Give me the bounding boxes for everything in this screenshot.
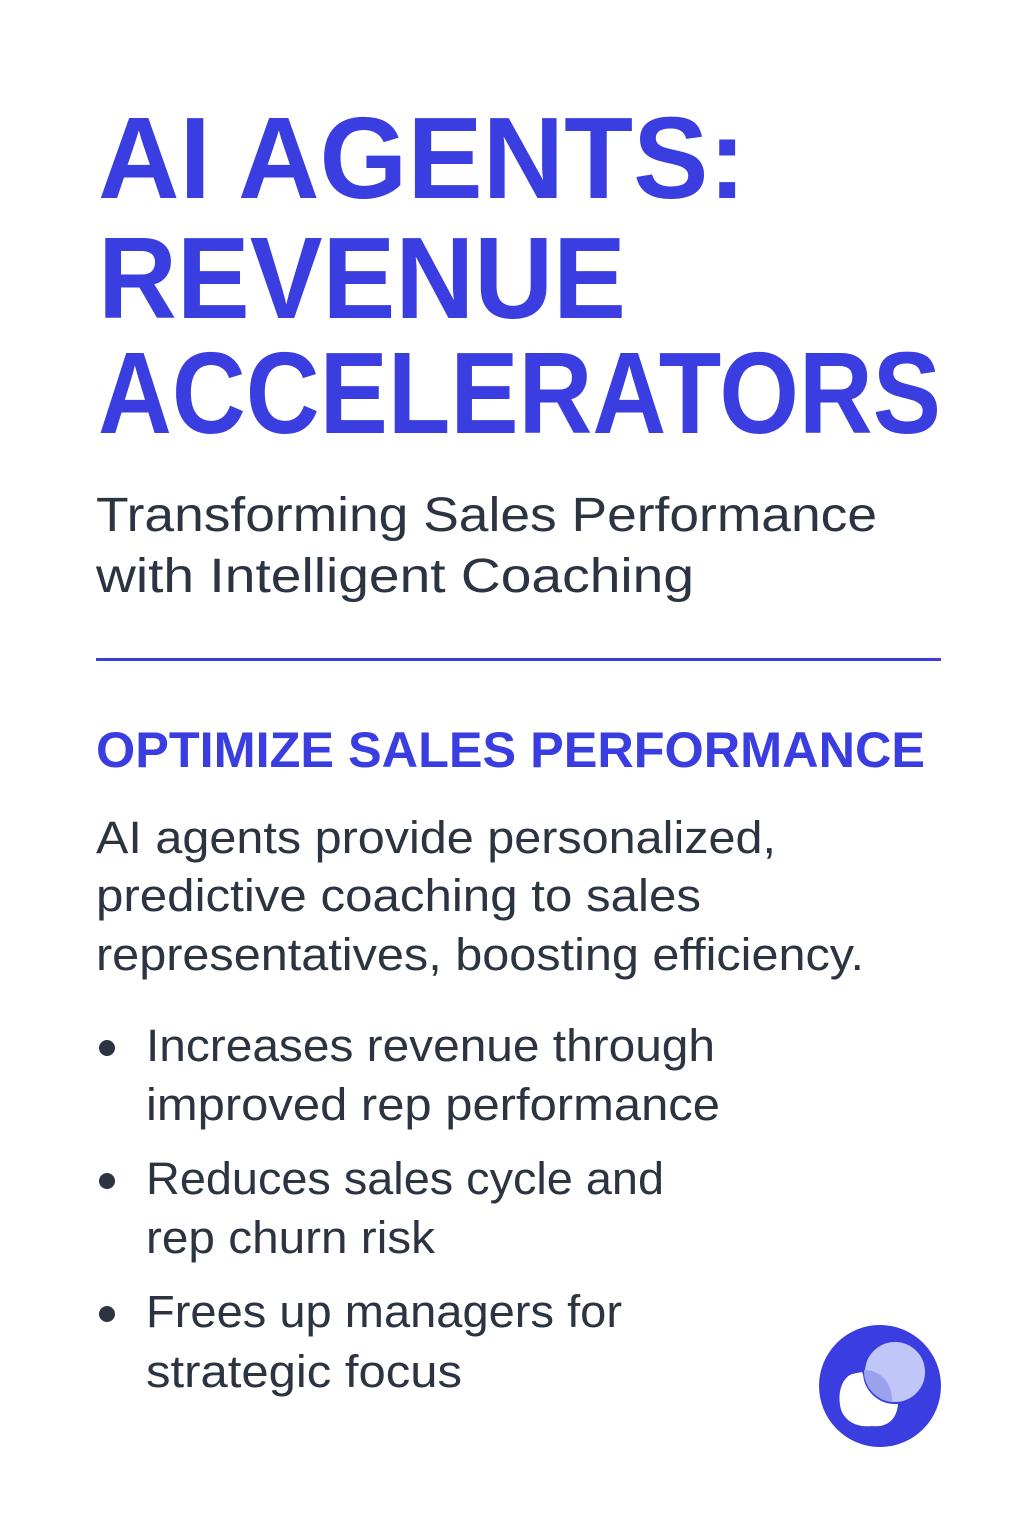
paragraph: representatives, boosting efficiency.: [96, 929, 864, 980]
bullet 3: [99, 1286, 622, 1397]
bullet 2: rep churn risk: [146, 1212, 436, 1263]
bullet 1: Increases revenue through: [146, 1020, 715, 1071]
paragraph: AI agents provide personalized,: [96, 812, 776, 863]
bullet 1: [99, 1020, 720, 1130]
bullet 3: strategic focus: [146, 1346, 462, 1397]
bullet 2: [99, 1153, 664, 1263]
subtitle: with Intelligent Coaching: [95, 550, 694, 603]
bullet 2: Reduces sales cycle and: [146, 1153, 664, 1204]
bullet 3: Frees up managers for: [146, 1286, 622, 1337]
bullet list: [99, 1020, 720, 1397]
subtitle: Transforming Sales Performance: [96, 489, 877, 542]
bullet 1: improved rep performance: [146, 1079, 720, 1130]
icon: logo: [819, 1325, 941, 1447]
section heading: OPTIMIZE SALES PERFORMANCE: [96, 722, 925, 778]
title: REVENUE: [98, 213, 626, 343]
title: [98, 93, 941, 458]
paragraph: [96, 812, 864, 980]
paragraph: predictive coaching to sales: [96, 870, 701, 921]
subtitle: [95, 489, 877, 603]
title: AI AGENTS:: [98, 93, 746, 223]
